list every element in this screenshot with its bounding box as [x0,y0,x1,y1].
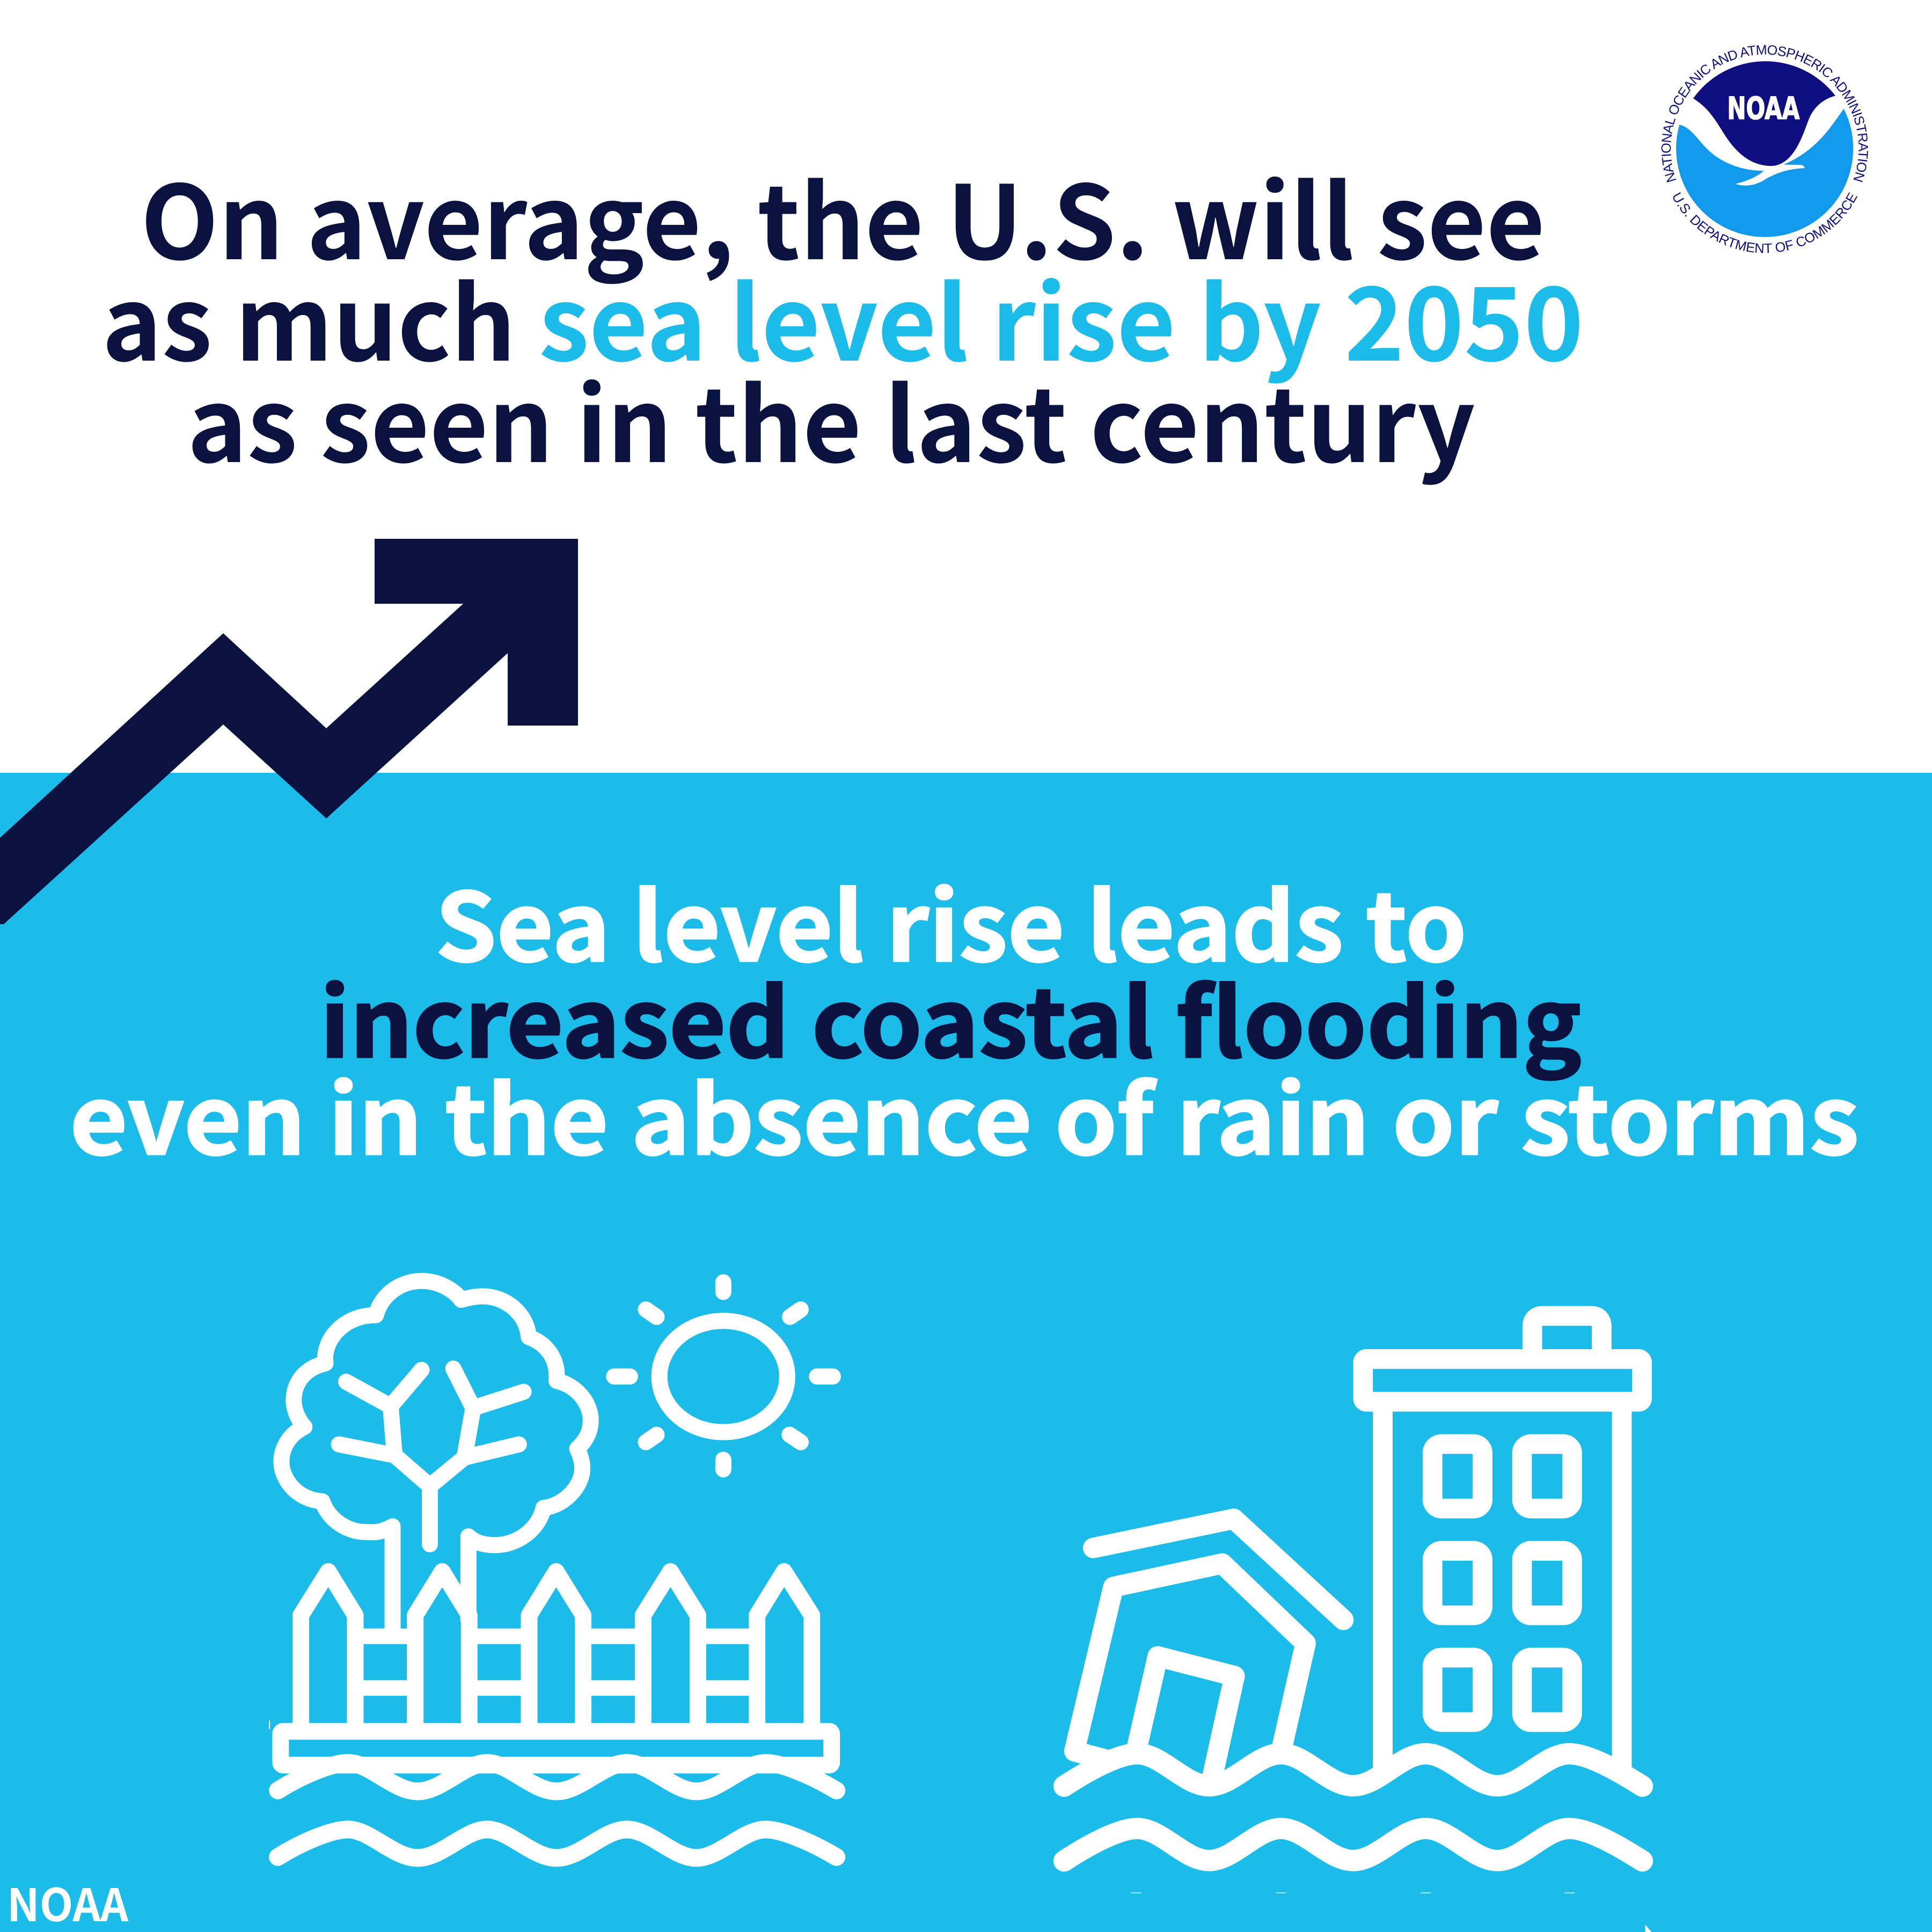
logo ring text: U.S. DEPARTMENT OF COMMERCE [1673,192,1857,253]
logo bird tail [1735,165,1805,186]
tree canopy and trunk outline [281,1281,591,1630]
logo ring text: NATIONAL OCEANIC AND ATMOSPHERIC ADMINISTRATION [1662,45,1868,182]
title: as seen in the last century [187,344,1475,492]
tree branches [339,1368,524,1545]
fence [281,1571,832,1765]
icon: flooded house and building [1064,1316,1651,1932]
water waves [278,1763,837,1858]
water waves [1064,1754,1642,1861]
heading: coastal flooding [70,852,1859,1182]
heading: coastal flooding: increased coastal flooding [320,948,1582,1085]
heading: coastal flooding: Sea level rise leads to [435,852,1467,989]
logo blue sea [1676,109,1853,237]
title: On average, the U.S. will see [141,141,1545,289]
icon: NOAA logo [1662,45,1868,253]
panel: blue lower section [0,773,1932,1932]
icon: rising arrow [0,539,578,924]
building [1363,1316,1642,1770]
logo wordmark: NOAA [1727,90,1800,126]
logo navy sky [1693,61,1835,166]
house [1074,1519,1343,1779]
title: as much sea level rise by 2050 [102,243,1584,390]
title [102,141,1584,492]
logo ring text [1662,45,1868,253]
icon: tree, sun and fence above water [269,1281,837,1858]
heading: coastal flooding: even in the absence of rain or storms [70,1045,1859,1182]
sun [614,1282,833,1469]
